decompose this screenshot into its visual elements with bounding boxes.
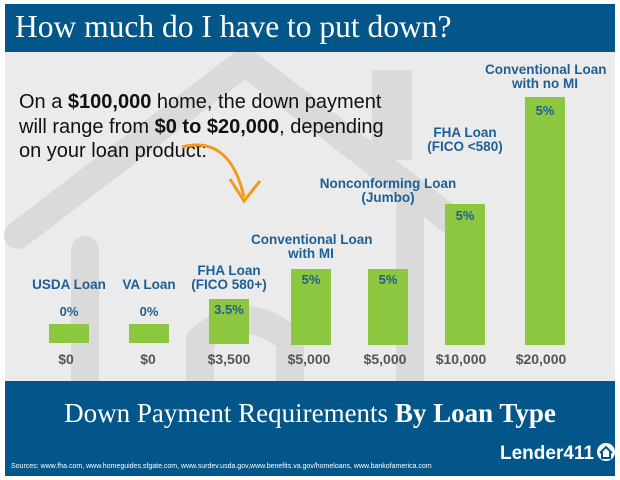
bar: Conventional with MI [251,232,372,367]
bar chart: 5% [302,272,320,287]
bar chart: (FICO 580+) [191,277,267,292]
bar chart: $5,000 [364,351,406,367]
bar chart: 5% [379,272,397,287]
bar chart [32,62,606,367]
bar chart: USDA Loan [32,277,106,292]
bar: USDA [32,277,106,367]
bar chart: Conventional Loan [485,62,606,77]
bar chart: with no MI [512,76,578,91]
bar chart: VA Loan [122,277,176,292]
bar: Jumbo [320,176,456,367]
bar: Conventional no MI [485,62,606,367]
intro text: will range from $0 to $20,000, depending [19,116,384,138]
bar chart: $0 [58,351,74,367]
bar chart: 3.5% [214,302,244,317]
logo: Lender411: Lender411 [500,443,594,464]
bar chart: Conventional Loan [251,232,372,247]
bar chart: 5% [456,208,474,223]
bar chart: $3,500 [208,351,250,367]
bar: FHA 580+ [191,263,267,367]
bar chart: $0 [140,351,156,367]
bar chart: Nonconforming Loan [320,176,456,191]
bar chart: 0% [60,304,78,319]
title: How much do I have to put down? [15,9,452,44]
bar chart: 5% [536,103,554,118]
sources: Sources: www.fha.com, www.homeguides.sfgate.com, www.surdev.usda.gov,www.benefits.va.gov/homeloans, www.bankofamerica.com [11,463,432,470]
bar: VA [122,277,176,367]
bar chart: FHA Loan [433,125,497,140]
bar chart: 0% [140,304,158,319]
bar chart: with MI [288,246,334,261]
intro text [19,91,384,162]
bar: FHA <580 [427,125,503,367]
bar chart: $10,000 [436,351,486,367]
header bar [5,4,615,52]
footer bar [5,381,615,476]
footer title: Down Payment Requirements By Loan Type [64,398,556,428]
bar chart: (Jumbo) [361,190,415,205]
arrow: orange curved [182,144,262,204]
intro text: On a $100,000 home, the down payment [19,91,381,113]
intro text: on your loan product: [19,140,207,162]
bar chart: (FICO <580) [427,139,503,154]
bar chart: $20,000 [516,351,566,367]
bar chart: FHA Loan [197,263,261,278]
bar chart: $5,000 [288,351,330,367]
